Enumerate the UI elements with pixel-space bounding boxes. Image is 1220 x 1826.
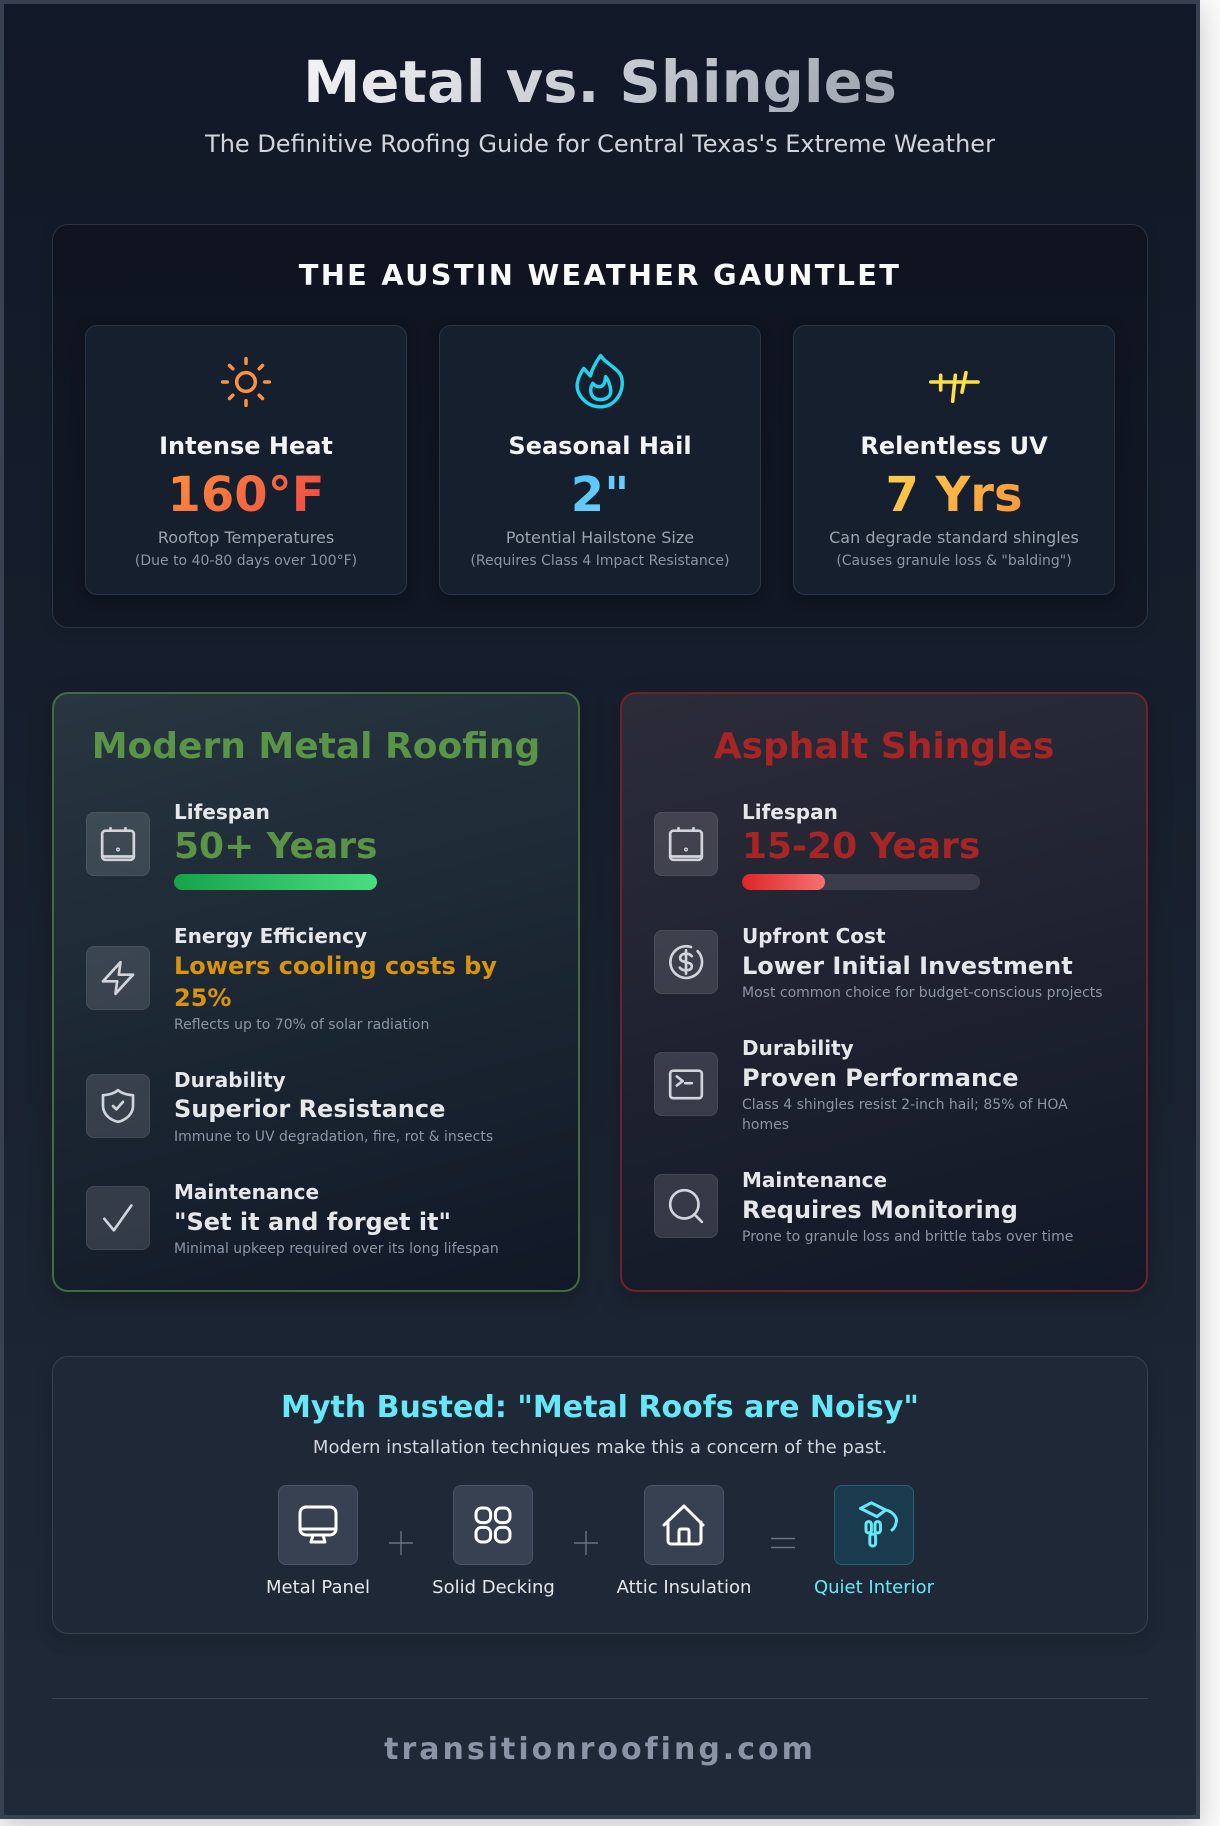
label: relentless UV: Relentless UV (860, 432, 1048, 460)
description: Class 4 shingles resist 2-inch hail; 85% of HOA (742, 1097, 1068, 1113)
note: days over 100°F: (Due to 40-80 days over 100°F) (135, 553, 357, 569)
stat: 7 years: 7 Yrs (885, 467, 1023, 523)
icon: sun (220, 356, 272, 408)
description: Minimal upkeep required over its long lifespan (174, 1241, 499, 1257)
value: Lower Initial Investment (742, 952, 1073, 980)
value: Proven Performance (742, 1064, 1019, 1092)
card: relentless UV (793, 325, 1115, 595)
label: Lifespan (174, 800, 270, 824)
row: lifespan (86, 800, 377, 890)
value: Superior Resistance (174, 1095, 445, 1123)
icon: bolt (86, 946, 150, 1010)
icon: terminal (654, 1052, 718, 1116)
value: 50+ years: 50+ Years (174, 826, 377, 867)
bar fill (742, 874, 825, 890)
label: solid decking: Solid Decking (432, 1577, 555, 1598)
card: seasonal hail (439, 325, 761, 595)
label: Maintenance (174, 1180, 319, 1204)
footer divider (52, 1698, 1148, 1699)
note: class 4 impact resistance: (Requires Class 4 Impact Resistance) (470, 553, 730, 569)
row: maintenance (654, 1168, 1073, 1245)
panel: the Austin weather gauntlet (52, 224, 1148, 628)
label: Upfront Cost (742, 924, 886, 948)
row: lifespan (654, 800, 980, 890)
label: quiet interior: Quiet Interior (814, 1577, 934, 1598)
description: degrade shingles: Can degrade standard shingles (829, 528, 1079, 547)
icon: shield check (86, 1074, 150, 1138)
value: Requires Monitoring (742, 1196, 1018, 1224)
heading: asphalt shingles: Asphalt Shingles (714, 726, 1054, 767)
label: Durability (742, 1036, 854, 1060)
subtitle: The Definitive Roofing Guide for Central Texas's Extreme Weather (205, 130, 995, 158)
icon: calendar (654, 812, 718, 876)
description: hailstone size: Potential Hailstone Size (506, 528, 694, 547)
value: cooling costs: 25% (174, 984, 231, 1012)
text: modern installation: Modern installation techniques make this a concern of the past. (313, 1437, 887, 1458)
title: Metal vs. Shingles (303, 48, 897, 116)
description: homes (742, 1117, 789, 1133)
step: attic insulation icon (644, 1485, 724, 1565)
heading: modern metal roofing: Modern Metal Roofing (92, 726, 540, 767)
icon: UV hatch (929, 370, 980, 403)
value: cooling costs (174, 952, 497, 1012)
operator: plus (389, 1531, 413, 1555)
card: intense heat (85, 325, 407, 595)
panel: myth busted (52, 1356, 1148, 1634)
description (742, 1097, 1068, 1133)
label: Durability (174, 1068, 286, 1092)
description: Most common choice for budget-conscious projects (742, 985, 1103, 1001)
label: intense heat: Intense Heat (159, 432, 333, 460)
bar: lifespan full (174, 874, 377, 890)
label: metal panel: Metal Panel (266, 1577, 370, 1598)
description: Immune to UV degradation, fire, rot & insects (174, 1129, 493, 1145)
step: quiet interior icon (834, 1485, 914, 1565)
label: Energy Efficiency (174, 924, 367, 948)
icon: dollar (654, 930, 718, 994)
value: cooling costs: Lowers cooling costs by (174, 952, 497, 980)
step: solid decking icon (453, 1485, 533, 1565)
label: Lifespan (742, 800, 838, 824)
stat: 2 inches: 2" (571, 467, 629, 523)
label: seasonal hail: Seasonal Hail (508, 432, 692, 460)
icon: flame (575, 354, 624, 408)
description: rooftop temperatures: Rooftop Temperatures (158, 528, 334, 547)
stat: 160°F: 160°F (168, 467, 324, 523)
footer: website: transitionroofing.com (384, 1732, 816, 1767)
heading: weather gauntlet: THE AUSTIN WEATHER GAUNTLET (299, 258, 901, 292)
panel: modern metal roofing (52, 692, 580, 1292)
label: Maintenance (742, 1168, 887, 1192)
row: maintenance (86, 1180, 499, 1257)
row: upfront cost (654, 924, 1103, 1001)
operator: equals (771, 1538, 795, 1548)
row: energy efficiency (86, 924, 497, 1033)
panel: asphalt shingles (620, 692, 1148, 1292)
label: attic insulation: Attic Insulation (617, 1577, 751, 1598)
value: "Set it and forget it" (174, 1208, 451, 1236)
row: durability (654, 1036, 1068, 1133)
row: durability (86, 1068, 493, 1145)
note: granule loss: (Causes granule loss & "balding") (836, 553, 1072, 569)
step: metal panel icon (278, 1485, 358, 1565)
description: Reflects up to 70% of solar radiation (174, 1017, 429, 1033)
icon: search (654, 1174, 718, 1238)
heading: myth busted: Myth Busted: "Metal Roofs are Noisy" (281, 1390, 919, 1425)
operator: plus (574, 1531, 598, 1555)
bar: lifespan partial (742, 874, 980, 890)
description: Prone to granule loss and brittle tabs over time (742, 1229, 1073, 1245)
icon: check (86, 1186, 150, 1250)
icon: calendar (86, 812, 150, 876)
value: 15-20 years: 15-20 Years (742, 826, 980, 867)
